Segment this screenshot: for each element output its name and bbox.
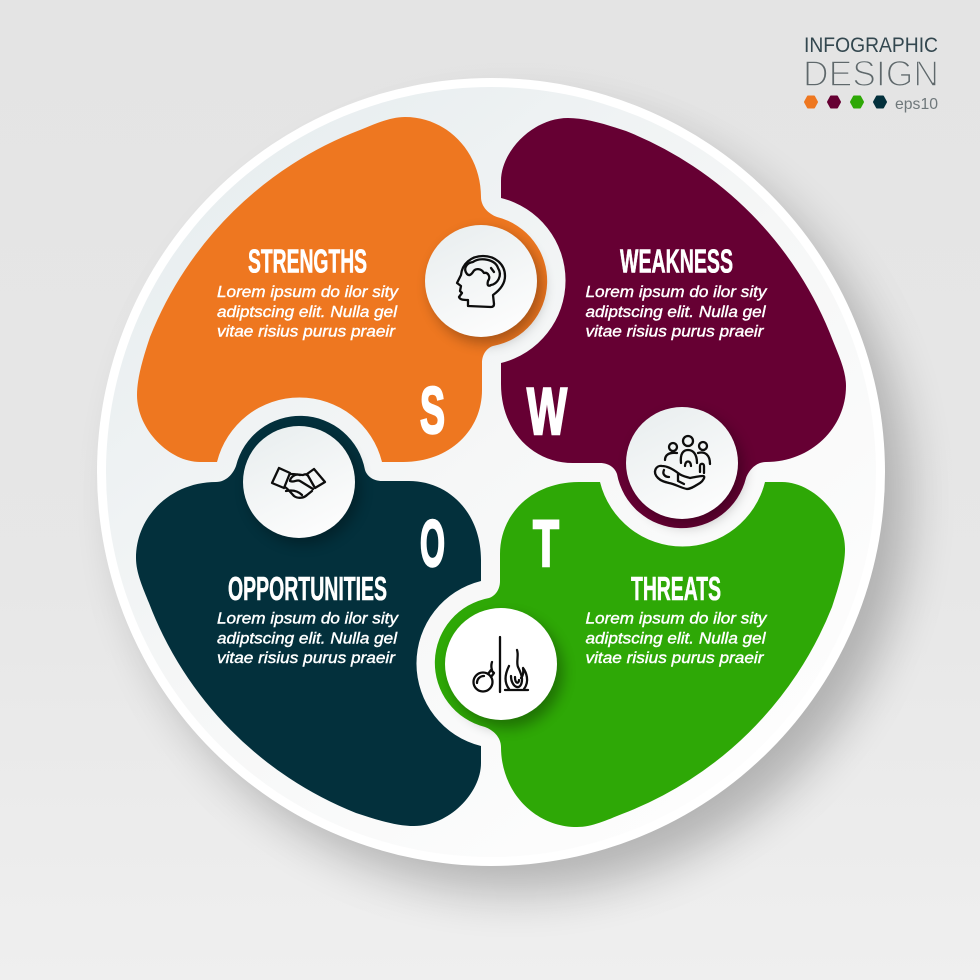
icon button: brain head bbox=[425, 225, 542, 343]
heading: strengths: STRENGTHS bbox=[248, 242, 367, 280]
text block: weakness bbox=[586, 284, 768, 340]
text block: opportunities: adiptscing elit. Nulla gel bbox=[217, 630, 397, 648]
heading: threats: THREATS bbox=[631, 570, 721, 607]
text block: strengths: vitae risius purus praeir bbox=[217, 324, 396, 340]
drop shadow of main circle bbox=[124, 108, 908, 892]
panel: opportunities bbox=[136, 416, 481, 826]
text block: opportunities: Lorem ipsum do ilor sity bbox=[217, 610, 399, 628]
heading: opportunities: OPPORTUNITIES bbox=[228, 570, 387, 607]
icon button: handshake bbox=[243, 426, 360, 544]
logo line: infographic: INFOGRAPHIC bbox=[804, 33, 938, 57]
text block: weakness: Lorem ipsum do ilor sity bbox=[586, 284, 768, 301]
panel: threats bbox=[435, 482, 845, 827]
panel: weakness bbox=[501, 118, 846, 528]
main circle plate bbox=[97, 78, 885, 866]
icon button: people in hand bbox=[626, 407, 743, 525]
heading: weakness: WEAKNESS bbox=[620, 242, 733, 280]
text block: weakness: vitae risius purus praeir bbox=[586, 324, 764, 340]
logo: infographic design eps10 bbox=[803, 33, 939, 113]
letter T: T bbox=[533, 506, 559, 580]
text block: strengths bbox=[217, 284, 399, 340]
logo colour hexagons bbox=[805, 96, 886, 108]
text block: opportunities: vitae risius purus praeir bbox=[217, 650, 396, 667]
text block: threats: Lorem ipsum do ilor sity bbox=[586, 610, 768, 628]
text block: opportunities bbox=[217, 610, 399, 667]
logo line: design: DESIGN bbox=[803, 53, 939, 94]
text block: threats bbox=[586, 610, 768, 667]
panel: strengths bbox=[137, 117, 547, 462]
letter W: W bbox=[527, 374, 567, 448]
letter S: S bbox=[420, 373, 445, 447]
icon button: bomb and fire bbox=[445, 608, 563, 728]
text block: weakness: adiptscing elit. Nulla gel bbox=[586, 304, 766, 321]
text block: threats: adiptscing elit. Nulla gel bbox=[586, 630, 766, 648]
logo line: eps10: eps10 bbox=[895, 96, 938, 113]
text block: strengths: adiptscing elit. Nulla gel bbox=[217, 304, 397, 321]
text block: strengths: Lorem ipsum do ilor sity bbox=[217, 284, 399, 301]
text block: threats: vitae risius purus praeir bbox=[586, 650, 764, 667]
panel: opportunities: O bbox=[420, 506, 445, 580]
